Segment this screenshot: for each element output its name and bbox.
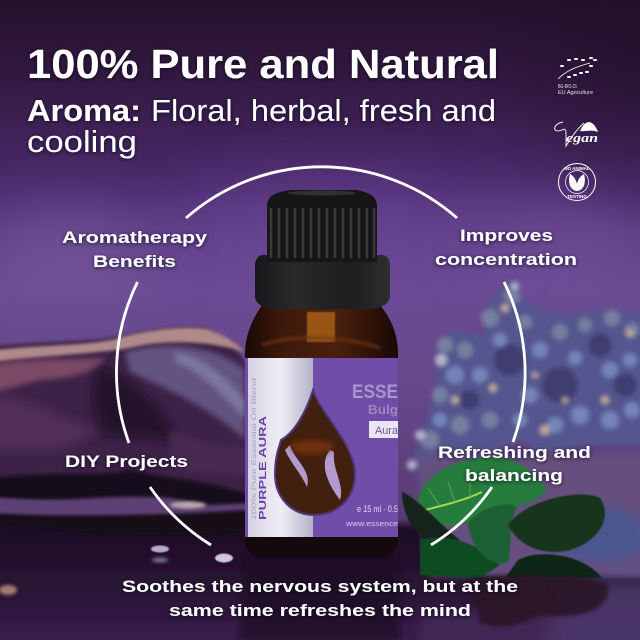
circular arc segments — [116, 167, 525, 545]
label: refreshing and balancing: balancing — [465, 466, 563, 485]
icon: no animal testing badge — [558, 164, 596, 200]
subtitle: aroma — [27, 93, 496, 159]
cap — [267, 190, 377, 262]
label: aromatherapy benefits — [62, 228, 208, 271]
subtitle: aroma: cooling — [27, 124, 137, 159]
icon: no animal testing badge: TESTING — [567, 194, 587, 199]
product pill — [369, 421, 399, 438]
brand text: ESSE — [352, 382, 398, 403]
mint leaves — [402, 457, 608, 627]
amethyst stone — [0, 327, 250, 595]
label purple — [245, 358, 398, 537]
bottle base — [246, 537, 397, 558]
mint reflection — [470, 576, 608, 627]
url text: www.essence — [345, 519, 398, 528]
label: soothes the nervous system: Soothes the nervous system, but at the — [122, 577, 518, 596]
label: aromatherapy benefits: Benefits — [93, 252, 176, 271]
subtitle: aroma: Floral, herbal, fresh and — [151, 93, 496, 128]
title: 100% Pure and Natural — [27, 41, 499, 87]
icon: vegan badge — [555, 122, 598, 146]
lavender right lower blurred — [420, 455, 640, 640]
label: improves concentration — [435, 226, 577, 269]
volume text: e 15 ml · 0.5 — [357, 504, 398, 515]
label white panel — [248, 358, 313, 537]
bottle glass body — [245, 305, 398, 558]
collar — [255, 255, 390, 309]
subtitle: aroma: Aroma: — [27, 93, 141, 128]
icon: EU organic leaf badge: EU Agriculture — [558, 90, 593, 96]
bottle reflection — [240, 560, 400, 640]
label: DIY projects: DIY Projects — [65, 452, 188, 471]
icon: EU organic leaf badge — [558, 58, 596, 96]
label side text: 100% Pure Essential Oil Blend — [252, 378, 258, 520]
label: refreshing and balancing: Refreshing and — [438, 443, 591, 462]
product bottle — [240, 190, 400, 640]
drop window — [275, 390, 355, 515]
label name: PURPLE AURA — [257, 415, 269, 520]
label: improves concentration: concentration — [435, 250, 577, 269]
label: refreshing and balancing — [438, 443, 591, 485]
lavender bunch — [407, 280, 640, 482]
product pill: Aura — [375, 425, 399, 437]
floor — [0, 512, 640, 640]
label: soothes the nervous system: same time refreshes the mind — [169, 601, 471, 620]
brand sub: Bulg — [368, 402, 398, 417]
label: improves concentration: Improves — [460, 226, 553, 245]
icon: EU organic leaf badge: BG-BIO-21 — [558, 84, 577, 90]
icon: vegan badge: egan — [566, 130, 598, 145]
icon: no animal testing badge: NO ANIMAL — [564, 166, 590, 171]
label: aromatherapy benefits: Aromatherapy — [62, 228, 208, 247]
label: soothes the nervous system — [122, 577, 518, 620]
